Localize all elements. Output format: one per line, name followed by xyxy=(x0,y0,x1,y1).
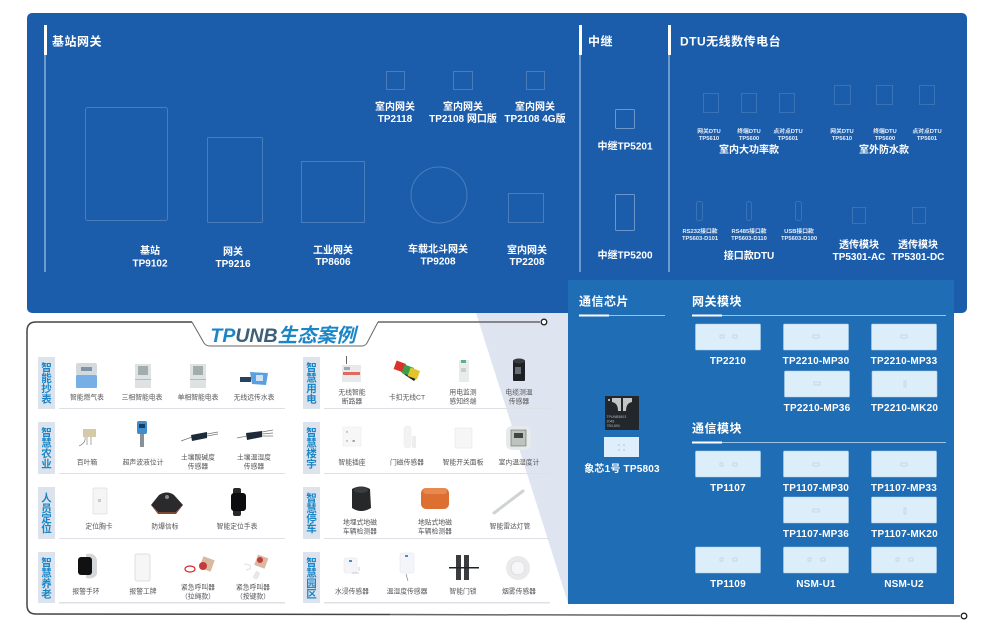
product: TP9102: 基站 xyxy=(140,244,160,257)
item: smart watch xyxy=(217,488,258,530)
module: TP2210 xyxy=(696,324,760,367)
module: TP2210-MK20 xyxy=(871,371,938,414)
item: smoke sensor xyxy=(502,556,536,596)
category: smart power xyxy=(303,357,320,409)
chip: TP5803: 2048 xyxy=(606,420,614,424)
item: alarm badge: 报警工牌 xyxy=(129,586,157,596)
category: personnel location: 位 xyxy=(41,522,52,535)
item: single-phase meter: 单相智能电表 xyxy=(178,392,219,402)
category: smart parking: 慧 xyxy=(306,502,317,515)
heading: base station gateways: 基站网关 xyxy=(52,34,102,48)
product: TP2118: TP2118 xyxy=(378,114,413,125)
category: smart campus: 慧 xyxy=(306,566,317,580)
category: smart agriculture xyxy=(38,422,55,474)
category: smart elderly care xyxy=(38,552,55,603)
module: TP2210: TP2210 xyxy=(710,356,746,367)
product: TP2108 network xyxy=(429,72,497,125)
item: water meter: 无线远传水表 xyxy=(234,392,275,402)
item: soil humidity sensor: 土壤温湿度 xyxy=(237,452,271,462)
category: personnel location: 员 xyxy=(41,503,52,515)
item: louver box: 百叶箱 xyxy=(77,458,97,466)
item: button call device: （按键款） xyxy=(236,592,270,600)
item: smart socket xyxy=(338,427,366,466)
item: power monitor terminal: 用电监测 xyxy=(449,388,477,396)
category: smart campus: 智 xyxy=(306,556,317,569)
item: smart switch panel: 智能开关面板 xyxy=(443,458,484,466)
category: smart parking: 车 xyxy=(306,522,317,535)
product: TP8606: 工业网关 xyxy=(313,244,353,256)
item: wireless breaker: 断路器 xyxy=(342,396,362,406)
item: alarm bracelet xyxy=(72,554,100,596)
item: smart socket: 智能插座 xyxy=(338,458,366,466)
item: buried magnetic detector: 车辆检测器 xyxy=(343,526,377,536)
product: TP5301-AC xyxy=(833,208,885,263)
product: TP2208 xyxy=(507,194,547,268)
module: TP1107-MK20: TP1107-MK20 xyxy=(871,529,938,540)
chip: TP5803: TPUNB5803 xyxy=(606,415,626,419)
item: soil humidity sensor xyxy=(237,430,273,470)
item: buried magnetic detector xyxy=(343,486,377,536)
group: indoor high-power DTU: 终端DTU xyxy=(737,127,761,135)
category: smart building xyxy=(303,422,320,474)
module: NSM-U1: NSM-U1 xyxy=(796,579,836,590)
product: TP2108 network: TP2108 网口版 xyxy=(429,112,497,125)
group: outdoor waterproof DTU: 网关DTU xyxy=(830,127,854,135)
product: TP9216 xyxy=(208,138,262,270)
category: smart campus: 区 xyxy=(306,588,317,600)
category: smart building: 智 xyxy=(306,426,317,439)
product: TP2208: TP2208 xyxy=(509,257,545,268)
item: soil humidity sensor: 传感器 xyxy=(244,462,264,470)
heading: gateway modules: 网关模块 xyxy=(692,294,742,308)
product: TP5301-DC xyxy=(892,208,944,263)
group: indoor high-power DTU: TP5600 xyxy=(739,136,759,142)
category: smart building: 慧 xyxy=(306,436,317,450)
module: TP2210-MP36: TP2210-MP36 xyxy=(784,403,851,414)
group: outdoor waterproof DTU: TP5600 xyxy=(875,136,895,142)
item: water meter xyxy=(234,372,275,402)
group: interface DTU: 接口款DTU xyxy=(724,249,774,262)
item: smart switch panel xyxy=(443,428,484,466)
category: personnel location: 定 xyxy=(41,512,52,525)
category: personnel location xyxy=(38,487,55,539)
item: smoke sensor: 烟雾传感器 xyxy=(502,586,536,596)
module: TP1109 xyxy=(696,547,760,590)
item: temperature-humidity sensor xyxy=(387,553,428,596)
chip: TP5803: 象芯1号 TP5803 xyxy=(584,462,660,475)
module: TP2210-MK20: TP2210-MK20 xyxy=(871,403,938,414)
product: TP5301-DC: 透传模块 xyxy=(898,238,938,251)
item: pull-cord call button xyxy=(181,556,215,600)
category: smart power: 慧 xyxy=(306,372,317,384)
group: interface DTU xyxy=(682,202,817,262)
frame: bottom line xyxy=(390,614,960,616)
item: button call device: 紧急呼叫器 xyxy=(236,582,270,592)
product: TP5301-DC: TP5301-DC xyxy=(892,252,944,263)
heading: chips: 通信芯片 xyxy=(579,294,629,308)
item: location badge: 定位胸卡 xyxy=(85,522,113,530)
product: TP5301-AC: TP5301-AC xyxy=(833,252,885,263)
item: soil pH sensor: 传感器 xyxy=(188,462,208,470)
module: TP1107-MP33: TP1107-MP33 xyxy=(871,483,937,494)
category: smart metering: 能 xyxy=(41,372,52,384)
item: pull-cord call button: （拉绳款） xyxy=(181,592,215,600)
section: relays xyxy=(579,25,613,272)
item: ultrasonic level gauge xyxy=(123,421,164,466)
product: TP2108 4G: TP2108 4G版 xyxy=(504,112,566,125)
product: TP9208: TP9208 xyxy=(420,256,456,268)
group: interface DTU: USB接口款 xyxy=(784,227,814,235)
product: TP5200 xyxy=(597,194,653,262)
product: TP2208: 室内网关 xyxy=(507,244,547,256)
module: TP2210-MP30 xyxy=(783,324,850,367)
item: smart watch: 智能定位手表 xyxy=(217,522,258,530)
module: TP1107 xyxy=(696,451,760,494)
category: smart parking xyxy=(303,487,320,539)
module: TP2210-MP36 xyxy=(784,371,851,414)
module: TP2210-MP33 xyxy=(871,324,938,367)
module: TP2210-MP30: TP2210-MP30 xyxy=(783,356,850,367)
item: soil pH sensor: 土壤酸碱度 xyxy=(181,452,215,462)
heading: chips xyxy=(579,294,665,316)
group: outdoor waterproof DTU: 室外防水款 xyxy=(859,143,909,156)
group: outdoor waterproof DTU: TP5601 xyxy=(917,136,938,142)
item: alarm badge xyxy=(129,554,157,596)
category: smart elderly care: 智 xyxy=(41,556,52,569)
product: TP8606 xyxy=(302,162,364,268)
title: TPUNB ecosystem xyxy=(192,322,378,347)
item: louver box xyxy=(77,429,97,466)
group: interface DTU: RS232接口款 xyxy=(682,227,718,235)
group: interface DTU: TP5603-D101 xyxy=(682,236,719,242)
group: interface DTU: TP5603-D110 xyxy=(731,236,767,242)
product: TP9216: TP9216 xyxy=(215,259,251,270)
item: location badge xyxy=(85,488,113,530)
item: button call device xyxy=(236,555,270,600)
group: indoor high-power DTU: 室内大功率款 xyxy=(719,143,779,156)
item: ultrasonic level gauge: 超声波液位计 xyxy=(123,458,164,466)
category: smart metering: 抄 xyxy=(41,382,52,395)
module: NSM-U1 xyxy=(784,547,848,590)
panel: top product panel xyxy=(27,13,967,313)
group: indoor high-power DTU: 网关DTU xyxy=(697,127,721,135)
category: smart building: 楼 xyxy=(306,447,317,460)
heading: communication modules: 通信模块 xyxy=(692,420,742,436)
item: door contact sensor: 门磁传感器 xyxy=(390,458,424,466)
item: power monitor terminal: 感知终端 xyxy=(449,396,477,406)
module: NSM-U2 xyxy=(872,547,936,590)
category: smart agriculture: 智 xyxy=(41,426,52,439)
category: smart elderly care: 养 xyxy=(41,577,52,590)
frame: top connector line xyxy=(378,319,547,325)
item: soil pH sensor xyxy=(181,432,218,470)
item: cable temperature sensor xyxy=(505,358,533,406)
item: single-phase meter xyxy=(178,364,219,402)
item: power monitor terminal xyxy=(449,360,477,406)
group: indoor high-power DTU xyxy=(697,94,803,156)
item: surface magnetic detector xyxy=(418,488,452,536)
item: three-phase meter xyxy=(122,364,163,402)
product: TP5200: 中继TP5200 xyxy=(597,248,653,262)
group: outdoor waterproof DTU: 点对点DTU xyxy=(912,127,942,135)
item: wireless breaker xyxy=(338,356,366,406)
section: base station gateways xyxy=(44,25,102,272)
category: smart agriculture: 慧 xyxy=(41,436,52,450)
category: smart metering: 智 xyxy=(41,361,52,374)
item: surface magnetic detector: 车辆检测器 xyxy=(418,526,452,536)
item: wireless breaker: 无线智能 xyxy=(338,388,366,396)
product: TP2118 xyxy=(375,72,415,125)
panel: chips and modules xyxy=(568,280,954,604)
module: TP1107-MK20 xyxy=(871,497,938,540)
category: smart power: 用 xyxy=(306,383,317,395)
group: indoor high-power DTU: 点对点DTU xyxy=(773,127,803,135)
group: outdoor waterproof DTU: TP5610 xyxy=(832,136,852,142)
item: indoor thermo-hygrometer: 室内温湿度计 xyxy=(499,458,540,466)
module: TP1109: TP1109 xyxy=(710,579,746,590)
item: explosion-proof beacon: 防爆信标 xyxy=(151,522,179,530)
product: TP5201: 中继TP5201 xyxy=(597,140,653,152)
item: buried magnetic detector: 地埋式地磁 xyxy=(343,518,377,526)
item: cable temperature sensor: 电缆测温 xyxy=(505,388,533,396)
item: gas meter: 智能燃气表 xyxy=(70,392,104,402)
product: TP2118: 室内网关 xyxy=(375,100,415,113)
product: TP5201 xyxy=(597,110,653,152)
module: NSM-U2: NSM-U2 xyxy=(884,579,924,590)
product: TP8606: TP8606 xyxy=(315,257,351,268)
panel: ecosystem backdrop xyxy=(476,313,568,603)
item: door contact sensor xyxy=(390,426,424,466)
item: clip-on CT xyxy=(389,361,425,402)
product: TP2108 network: 室内网关 xyxy=(443,100,483,113)
item: smart radar tube: 智能雷达灯管 xyxy=(490,522,531,530)
category: personnel location: 人 xyxy=(41,492,52,504)
item: water leak sensor: 水浸传感器 xyxy=(335,586,369,596)
category: smart power: 智 xyxy=(306,361,317,374)
category: smart building: 宇 xyxy=(306,458,317,470)
product: TP9102: TP9102 xyxy=(132,258,168,270)
frame: bottom connector dot xyxy=(961,613,967,619)
item: alarm bracelet: 报警手环 xyxy=(72,586,100,596)
product: TP9208 xyxy=(408,167,468,268)
category: smart elderly care: 慧 xyxy=(41,566,52,580)
item: smart door lock: 智能门锁 xyxy=(449,586,477,596)
module: TP2210-MP33: TP2210-MP33 xyxy=(871,356,938,367)
category: smart campus xyxy=(303,552,320,603)
chip: TP5803 xyxy=(584,396,660,475)
category: smart campus: 园 xyxy=(306,578,317,590)
title: TPUNB ecosystem: TPUNB生态案例 xyxy=(210,325,359,347)
module: TP1107-MP33 xyxy=(871,451,937,494)
category: smart metering: 表 xyxy=(41,392,52,406)
product: TP9102 xyxy=(86,108,168,270)
module: TP1107: TP1107 xyxy=(710,483,746,494)
module: TP1107-MP30 xyxy=(783,451,849,494)
heading: relays: 中继 xyxy=(588,34,613,48)
item: gas meter xyxy=(70,363,104,402)
item: smart door lock xyxy=(449,555,479,596)
category: smart elderly care: 老 xyxy=(41,588,52,600)
item: explosion-proof beacon xyxy=(151,492,183,530)
item: clip-on CT: 卡扣无线CT xyxy=(389,392,425,402)
module: TP1107-MP30: TP1107-MP30 xyxy=(783,483,849,494)
item: smart radar tube xyxy=(490,491,531,530)
item: surface magnetic detector: 地贴式地磁 xyxy=(418,518,452,526)
group: interface DTU: RS485接口款 xyxy=(731,227,767,235)
section: DTU xyxy=(668,25,781,272)
heading: DTU: DTU无线数传电台 xyxy=(680,34,781,48)
category: smart agriculture: 农 xyxy=(41,447,52,460)
item: indoor thermo-hygrometer xyxy=(499,426,540,466)
category: smart parking: 停 xyxy=(306,512,317,525)
chip: TP5803: 7B3-890 xyxy=(606,424,620,428)
item: temperature-humidity sensor: 温湿度传感器 xyxy=(387,586,428,596)
item: cable temperature sensor: 传感器 xyxy=(509,396,529,406)
group: outdoor waterproof DTU: 终端DTU xyxy=(873,127,897,135)
module: TP1107-MP36: TP1107-MP36 xyxy=(783,529,849,540)
category: smart parking: 智 xyxy=(306,492,317,504)
frame: ecosystem outline xyxy=(27,322,390,614)
group: interface DTU: TP5603-D100 xyxy=(781,236,817,242)
product: TP2108 4G: 室内网关 xyxy=(515,100,555,113)
group: outdoor waterproof DTU xyxy=(830,86,942,156)
category: smart power: 电 xyxy=(306,392,317,406)
product: TP5301-AC: 透传模块 xyxy=(839,238,879,251)
item: water leak sensor xyxy=(335,558,369,596)
category: smart agriculture: 业 xyxy=(41,458,52,470)
item: three-phase meter: 三相智能电表 xyxy=(122,392,163,402)
product: TP9216: 网关 xyxy=(223,245,243,258)
module: TP1107-MP36 xyxy=(783,497,849,540)
product: TP9208: 车载北斗网关 xyxy=(408,242,468,256)
item: pull-cord call button: 紧急呼叫器 xyxy=(181,582,215,592)
group: indoor high-power DTU: TP5610 xyxy=(699,136,719,142)
group: indoor high-power DTU: TP5601 xyxy=(778,136,799,142)
product: TP2108 4G xyxy=(504,72,566,125)
category: smart metering xyxy=(38,357,55,409)
